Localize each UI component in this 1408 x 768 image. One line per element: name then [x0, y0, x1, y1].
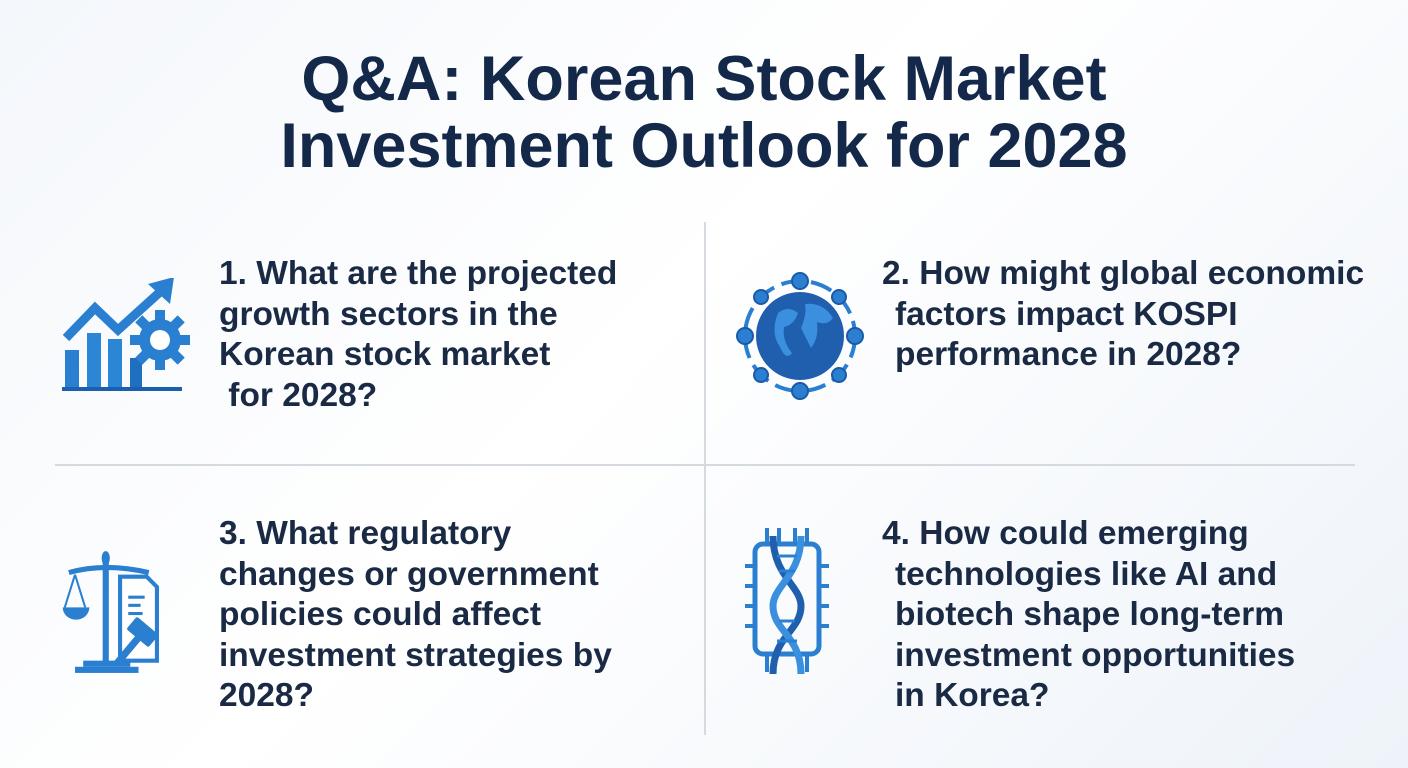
icon: globe with cycle [736, 272, 864, 400]
question 3: policies could affect [219, 596, 541, 633]
question 1: Korean stock market [219, 336, 550, 373]
question 4: 4. How could emerging [882, 515, 1249, 552]
question 4: technologies like AI and [895, 556, 1277, 592]
question 3: 3. What regulatory [219, 515, 511, 552]
question 2 [882, 255, 1364, 373]
title: Q&A: Korean Stock Market [301, 44, 1107, 114]
question 4: biotech shape long-term [895, 596, 1284, 633]
icon: growth chart with gear [62, 278, 190, 391]
question 3: investment strategies by [219, 636, 612, 674]
question 3: changes or government [219, 556, 599, 592]
question 1: growth sectors in the [219, 296, 558, 332]
icon: DNA chip [745, 528, 829, 674]
question 2: 2. How might global economic [882, 255, 1364, 292]
question 4: in Korea? [895, 677, 1050, 714]
question 2: performance in 2028? [895, 336, 1241, 373]
title [280, 44, 1128, 181]
question 3 [219, 515, 612, 714]
question 4: investment opportunities [895, 636, 1295, 674]
question 4 [882, 515, 1295, 714]
icon: scale and gavel [62, 551, 159, 673]
question 2: factors impact KOSPI [895, 296, 1238, 332]
question 1 [219, 255, 617, 414]
question 3: 2028? [219, 677, 314, 714]
question 1: 1. What are the projected [219, 255, 617, 292]
title: Investment Outlook for 2028 [280, 111, 1128, 181]
question 1: for 2028? [228, 376, 377, 414]
